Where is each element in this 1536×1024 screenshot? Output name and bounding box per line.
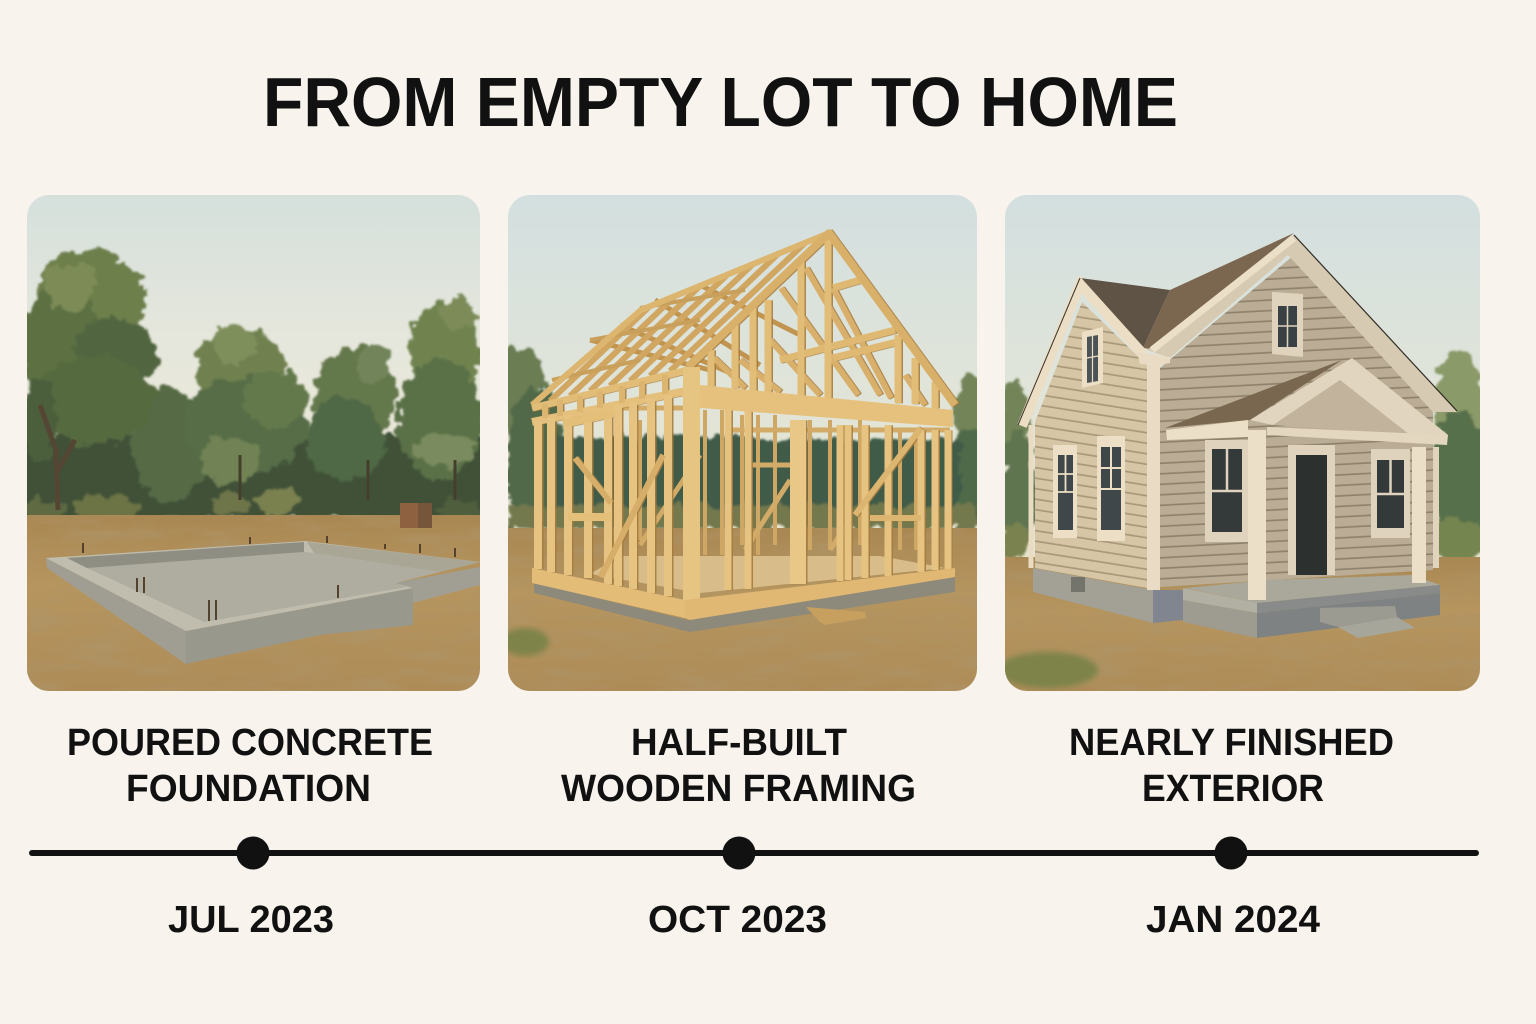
front windows: [1205, 440, 1410, 542]
main gable trim: [1147, 235, 1457, 412]
caption: half-built wooden framing: [561, 722, 916, 810]
panel: finished house photo: [998, 195, 1490, 691]
date: Oct 2023: OCT 2023: [648, 899, 827, 941]
top beam: [700, 385, 953, 427]
steps: [1320, 606, 1415, 638]
timeline marker: Jan 2024: [1214, 836, 1248, 870]
side upper window: [1082, 327, 1103, 388]
ground: [1005, 557, 1480, 691]
wing gable trim: [1022, 284, 1143, 426]
timeline marker: Oct 2023: [722, 836, 756, 870]
porch roof: [1165, 358, 1448, 445]
date: Jul 2023: JUL 2023: [168, 899, 334, 941]
date: Jan 2024: JAN 2024: [1146, 899, 1320, 941]
upper window: [1272, 292, 1303, 357]
porch columns: [1248, 430, 1426, 600]
caption: half-built wooden framing: WOODEN FRAMING: [561, 768, 916, 810]
caption: nearly finished exterior: EXTERIOR: [1142, 768, 1324, 810]
timeline: [29, 836, 1479, 870]
porch slab: [1183, 575, 1440, 638]
roof rafters and purlins: [550, 243, 805, 401]
corner board: [1137, 352, 1170, 590]
foundation under frame: [534, 577, 955, 632]
utility box: [400, 503, 432, 528]
ridge silhouette: [532, 233, 829, 405]
ground: [508, 528, 977, 691]
rebar stakes: [83, 536, 455, 621]
side trees: [999, 350, 1490, 562]
caption: poured concrete foundation: POURED CONCRETE: [67, 722, 433, 764]
caption: poured concrete foundation: [67, 722, 433, 810]
front door: [1288, 445, 1335, 575]
caption: nearly finished exterior: NEARLY FINISHED: [1069, 722, 1394, 764]
sill plates: [532, 568, 685, 618]
corner post: [683, 367, 700, 618]
wing foundation: [1033, 568, 1183, 623]
caption: poured concrete foundation: FOUNDATION: [126, 768, 371, 810]
background trees: [498, 345, 990, 530]
right side trim: [1433, 447, 1439, 568]
deck: [590, 556, 945, 593]
treeline: [20, 248, 490, 521]
caption: half-built wooden framing: HALF-BUILT: [631, 722, 847, 764]
panel: concrete foundation photo: [20, 195, 490, 691]
timeline marker: Jul 2023: [236, 836, 270, 870]
caption: nearly finished exterior: [1069, 722, 1394, 810]
rear framing: [640, 410, 916, 555]
panel: wooden framing photo: [498, 195, 990, 691]
side wing wall: [1035, 302, 1147, 588]
roof: [1080, 233, 1294, 349]
left wall: [532, 370, 688, 596]
title: FROM EMPTY LOT TO HOME: [263, 63, 1178, 141]
gable frame: [688, 233, 955, 408]
right wall: [728, 410, 948, 590]
concrete slab: [46, 541, 480, 664]
side windows: [1053, 436, 1125, 541]
ground: [27, 515, 480, 691]
wood ladder on ground: [806, 607, 866, 625]
main facade: [1160, 255, 1433, 587]
